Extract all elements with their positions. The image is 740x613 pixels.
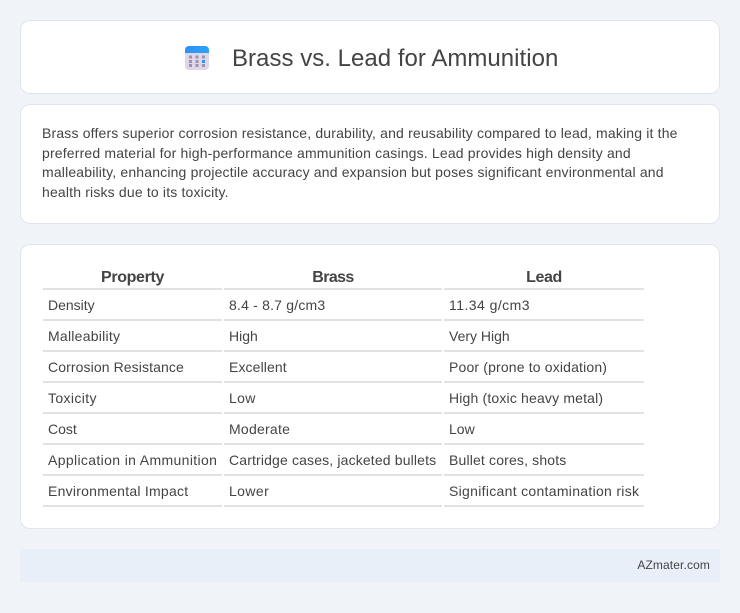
summary text: preferred material for high-performance ammunition casings. Lead provides high density and <box>42 145 631 161</box>
row: malleability: Very High <box>449 328 510 344</box>
row: environmental impact: Environmental Impact <box>48 483 188 499</box>
summary text <box>42 125 678 200</box>
row: corrosion resistance: Poor (prone to oxidation) <box>449 359 607 375</box>
row: application in ammunition: Cartridge cases, jacketed bullets <box>229 452 436 468</box>
row: cost <box>48 421 475 437</box>
row: toxicity <box>48 390 603 406</box>
row: corrosion resistance: Corrosion Resistance <box>48 359 184 375</box>
row: malleability: High <box>229 328 258 344</box>
row: cost: Low <box>449 421 475 437</box>
row: malleability <box>48 328 510 344</box>
panel: comparison table <box>20 244 720 529</box>
row: density: 8.4 - 8.7 g/cm3 <box>229 297 325 313</box>
row: application in ammunition: Application in Ammunition <box>48 452 217 468</box>
footer bar <box>20 549 720 582</box>
row: environmental impact: Significant contamination risk <box>449 483 639 499</box>
summary text: malleability, enhancing projectile accuracy and expansion but poses significant environmental and <box>42 164 664 180</box>
row: density <box>48 297 530 313</box>
summary text: Brass offers superior corrosion resistance, durability, and reusability compared to lead, making it the <box>42 125 678 141</box>
row: corrosion resistance <box>48 359 607 375</box>
panel: summary <box>20 104 720 224</box>
row: toxicity: Low <box>229 390 256 406</box>
row: toxicity: High (toxic heavy metal) <box>449 390 603 406</box>
icon: calendar grid <box>185 46 209 70</box>
row: toxicity: Toxicity <box>48 390 97 406</box>
row: environmental impact: Lower <box>229 483 269 499</box>
summary text: health risks due to its toxicity. <box>42 184 229 200</box>
row: cost: Cost <box>48 421 77 437</box>
row: corrosion resistance: Excellent <box>229 359 287 375</box>
row: malleability: Malleability <box>48 328 120 344</box>
table header: Lead <box>526 269 562 286</box>
title: Brass vs. Lead for Ammunition <box>232 45 558 72</box>
row: application in ammunition: Bullet cores, shots <box>449 452 566 468</box>
table header <box>101 269 562 286</box>
row: density: Density <box>48 297 95 313</box>
table header: Brass <box>312 269 354 286</box>
row: density: 11.34 g/cm3 <box>449 297 530 313</box>
panel: title card <box>20 20 720 94</box>
row: cost: Moderate <box>229 421 290 437</box>
row: environmental impact <box>48 483 639 499</box>
table header: Property <box>101 269 164 286</box>
footer credit: AZmater.com <box>637 558 710 572</box>
row: application in ammunition <box>48 452 566 468</box>
